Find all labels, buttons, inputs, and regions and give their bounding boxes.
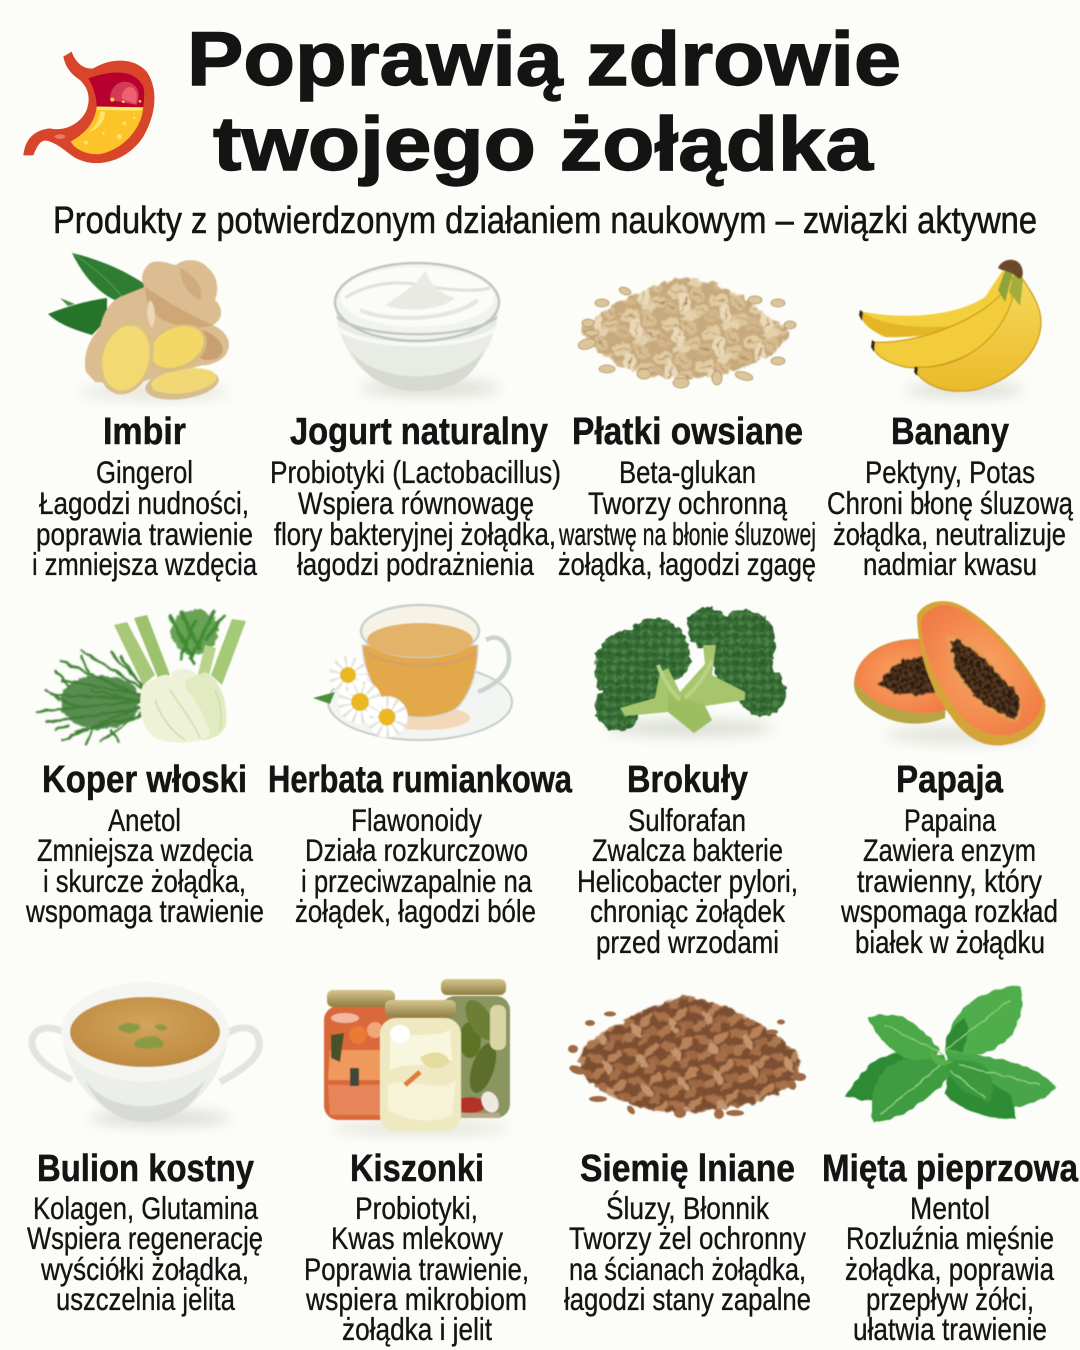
text block: ułatwia trawienie (853, 1311, 1047, 1347)
heading: Herbata rumiankowa (268, 759, 573, 801)
title (187, 17, 901, 187)
text block: łagodzi stany zapalne (564, 1281, 811, 1317)
title: Poprawią zdrowie (187, 17, 901, 102)
text block (845, 1190, 1054, 1347)
text block: i przeciwzapalnie na (301, 863, 532, 899)
icon: flax seeds (568, 997, 806, 1119)
text block: chroniąc żołądek (590, 893, 785, 929)
text block (27, 1190, 263, 1317)
icon: stomach (23, 52, 154, 163)
text block: na ścianach żołądka, (569, 1251, 806, 1287)
icon: mint (846, 986, 1056, 1123)
text block: Wspiera równowagę (298, 485, 534, 521)
text block (295, 802, 536, 929)
panel: Płatki owsiane (558, 277, 816, 582)
heading: Papaja (896, 759, 1004, 801)
text block: warstwę na błonie śluzowej (558, 516, 816, 552)
text block: Flawonoidy (351, 802, 482, 838)
text block: Probiotyki, (355, 1190, 478, 1226)
panel: Brokuły (577, 607, 798, 960)
text block: Helicobacter pylori, (577, 863, 798, 899)
text block: Łagodzi nudności, (39, 485, 249, 521)
text block: Tworzy ochronną (588, 485, 787, 521)
title: twojego żołądka (213, 102, 874, 187)
text block: przepływ żółci, (866, 1281, 1034, 1317)
panel: Papaja (840, 601, 1058, 960)
heading: Płatki owsiane (572, 411, 803, 453)
text block: przed wrzodami (596, 924, 779, 960)
text block (577, 802, 798, 960)
text block: flory bakteryjnej żołądka, (274, 516, 556, 552)
text block (827, 454, 1073, 582)
icon: broth bowl (32, 982, 259, 1126)
text block: Gingerol (96, 454, 193, 490)
text block: Działa rozkurczowo (305, 832, 528, 868)
text block: żołądka, łagodzi zgagę (558, 546, 816, 582)
icon: broccoli (594, 607, 786, 736)
text block: łagodzi podrażnienia (297, 546, 534, 582)
panel: Herbata rumiankowa (268, 605, 573, 929)
icon: oats (577, 277, 796, 388)
text block (25, 802, 264, 929)
text block: i skurcze żołądka, (43, 863, 246, 899)
heading: Banany (891, 411, 1009, 453)
text block: wspiera mikrobiom (305, 1281, 527, 1317)
text block (32, 454, 257, 582)
text block (270, 454, 561, 582)
text block: żołądek, łagodzi bóle (295, 893, 536, 929)
text block (304, 1190, 529, 1347)
text block: Wspiera regenerację (27, 1220, 263, 1256)
text block: uszczelnia jelita (56, 1281, 235, 1317)
text block (564, 1190, 811, 1317)
panel: Kiszonki (304, 979, 529, 1347)
heading: Brokuły (627, 759, 748, 801)
text block: Papaina (904, 802, 996, 838)
heading: Koper włoski (42, 759, 247, 801)
panel: Siemię lniane (564, 997, 811, 1317)
panel: Mięta pieprzowa (822, 986, 1079, 1347)
icon: ginger (48, 253, 230, 404)
heading: Bulion kostny (37, 1148, 254, 1190)
text block: Beta-glukan (619, 454, 756, 490)
text block: Tworzy żel ochronny (569, 1220, 806, 1256)
text block: trawienny, który (857, 863, 1042, 899)
icon: fermented jars (324, 979, 510, 1135)
text block (558, 454, 816, 582)
panel: Banany (827, 260, 1073, 582)
text block: białek w żołądku (855, 924, 1045, 960)
panel: Koper włoski (25, 610, 264, 929)
text block: poprawia trawienie (36, 516, 253, 552)
heading: Kiszonki (350, 1148, 484, 1190)
icon: yogurt bowl (335, 263, 500, 396)
panel: Jogurt naturalny (270, 263, 561, 582)
text block: Zmniejsza wzdęcia (37, 832, 253, 868)
text block: Probiotyki (Lactobacillus) (270, 454, 561, 490)
text block: Zwalcza bakterie (592, 832, 783, 868)
text block: wspomaga trawienie (25, 893, 264, 929)
icon: fennel (36, 610, 246, 745)
icon: chamomile tea (313, 605, 512, 740)
text block: Kwas mlekowy (331, 1220, 503, 1256)
heading: Siemię lniane (580, 1148, 795, 1190)
text block: Mentol (910, 1190, 990, 1226)
text block: Kolagen, Glutamina (33, 1190, 258, 1226)
text block: Pektyny, Potas (865, 454, 1035, 490)
heading: Imbir (103, 411, 186, 453)
text block: i zmniejsza wzdęcia (32, 546, 257, 582)
panel: Imbir (32, 253, 257, 582)
text block: Zawiera enzym (863, 832, 1036, 868)
text block: wyściółki żołądka, (40, 1251, 249, 1287)
panel: Bulion kostny (27, 982, 263, 1317)
text block: nadmiar kwasu (863, 546, 1037, 582)
heading: Jogurt naturalny (290, 411, 548, 453)
text block: Sulforafan (628, 802, 746, 838)
icon: papaya (854, 601, 1045, 746)
text block: Śluzy, Błonnik (606, 1190, 769, 1226)
text block: żołądka i jelit (342, 1311, 492, 1347)
text block: Anetol (108, 802, 181, 838)
text block (840, 802, 1058, 960)
text block: Poprawia trawienie, (304, 1251, 529, 1287)
icon: bananas (859, 260, 1041, 397)
